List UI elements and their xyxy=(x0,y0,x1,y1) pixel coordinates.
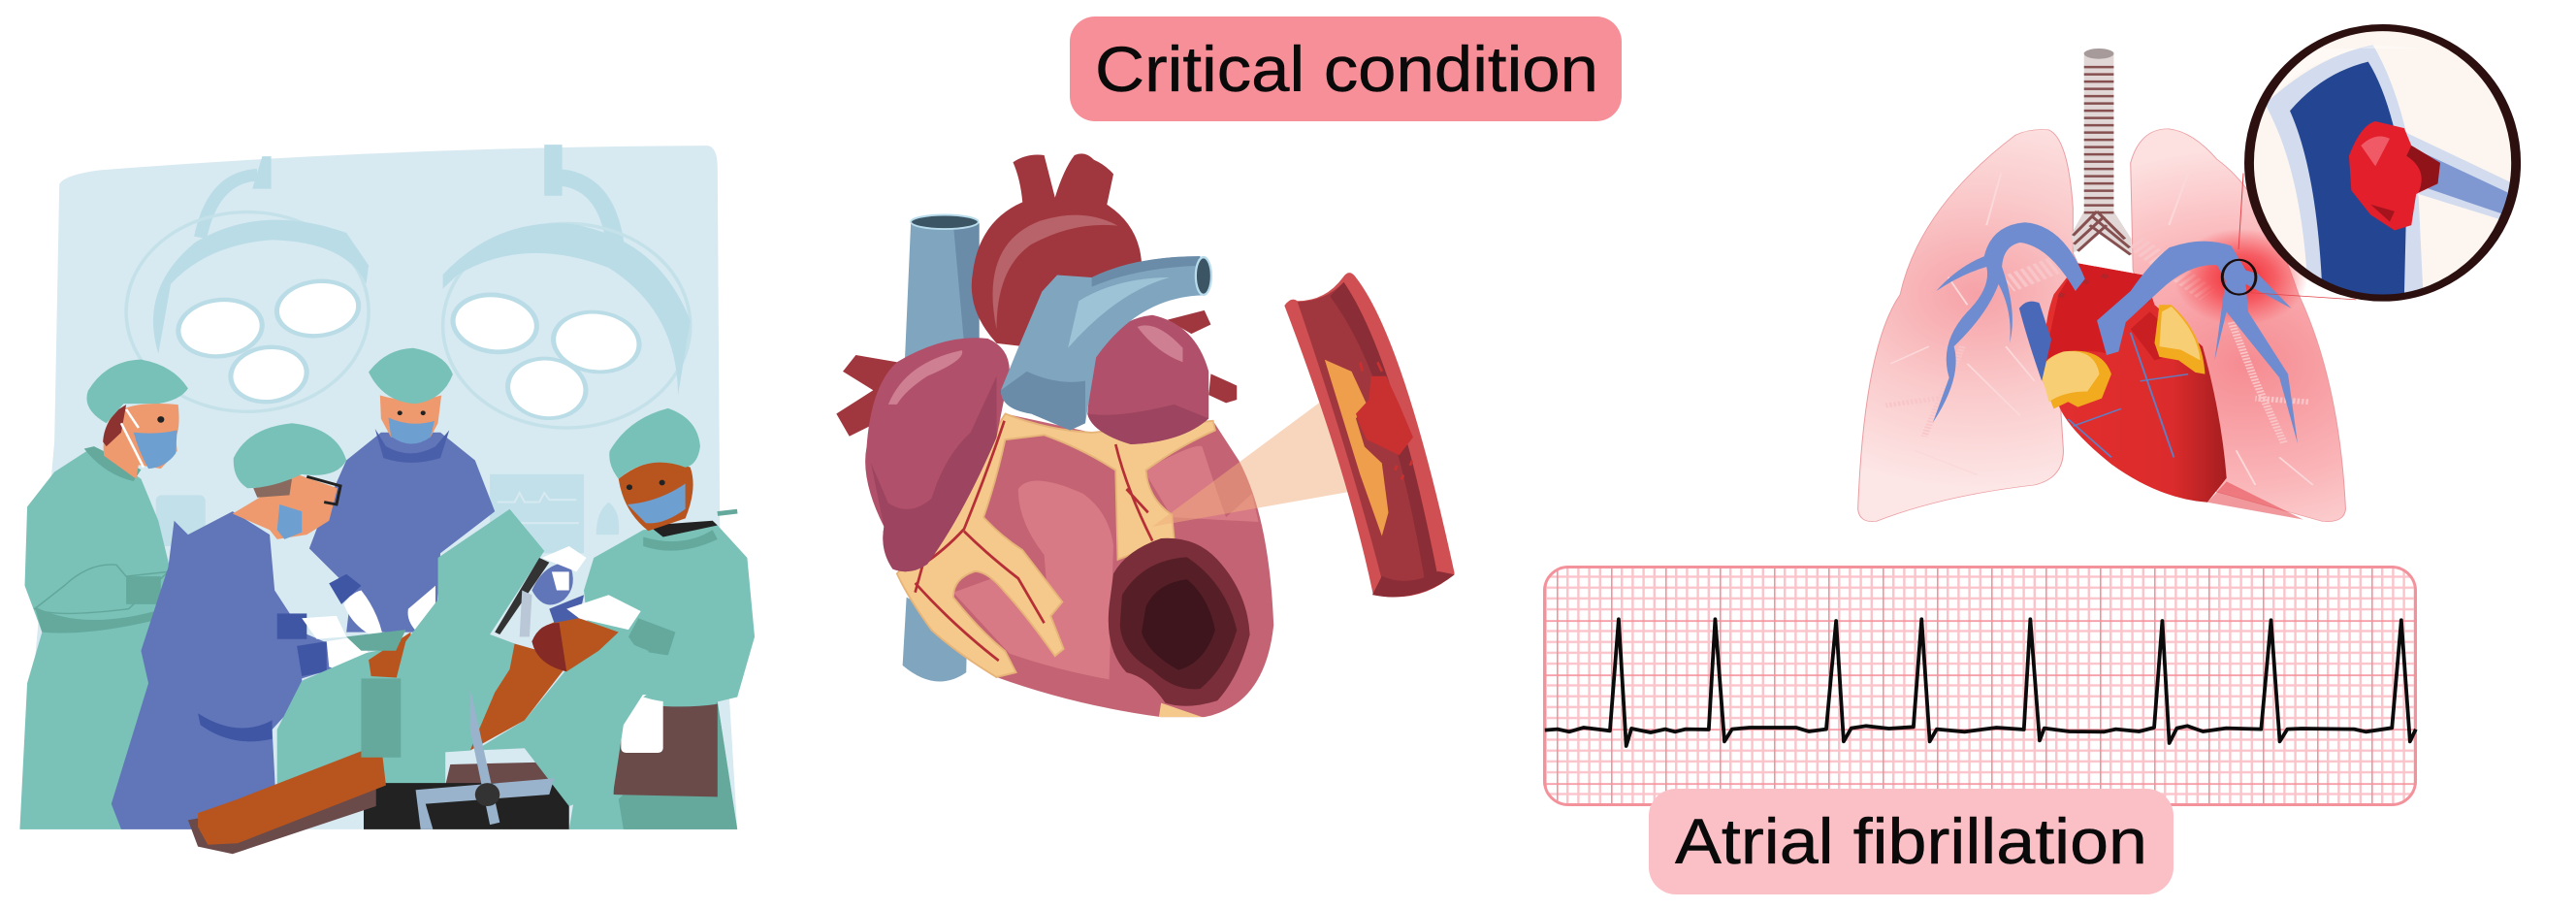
surgeon: right, teal gown xyxy=(569,408,755,829)
main ventricle xyxy=(897,414,1273,717)
illustration: heart with infarct and blocked artery xyxy=(836,153,1455,717)
surgeon: centre, blue gown xyxy=(309,348,495,636)
lung: left xyxy=(1858,130,2077,522)
embolus locator ring xyxy=(2222,260,2256,295)
zoom guide lines xyxy=(2238,174,2356,300)
label pill: Atrial fibrillation xyxy=(1649,789,2174,894)
pulmonary trunk and vessels xyxy=(836,153,1237,437)
illustration: surgical team in operating room xyxy=(19,145,755,854)
monitor in background xyxy=(156,474,619,553)
heart xyxy=(2042,263,2303,520)
label pill: Atrial fibrillation: Atrial fibrillation xyxy=(1675,805,2147,877)
illustration: lungs, heart and pulmonary embolism xyxy=(1858,28,2516,522)
pulmonary vessels xyxy=(1933,222,2298,443)
trachea and bronchi xyxy=(2072,49,2132,256)
ECG strip panel xyxy=(1543,566,2417,806)
magnified vessel with clot xyxy=(2249,28,2516,298)
table clamp xyxy=(416,688,554,829)
vena cava xyxy=(903,215,980,681)
aorta xyxy=(1001,256,1211,431)
head drape xyxy=(475,636,653,806)
ECG trace xyxy=(1545,619,2416,746)
coronary fat and arteries xyxy=(897,414,1215,717)
surgeon: front, blue gown xyxy=(112,423,369,829)
operating table xyxy=(188,763,569,854)
surgical lamp: right xyxy=(443,145,691,428)
myocardial infarct zone xyxy=(1109,538,1250,706)
lung: right xyxy=(2131,129,2345,522)
surgical lamp: left xyxy=(126,156,369,411)
blocked artery cross-section xyxy=(1284,273,1455,597)
left atrium xyxy=(1087,315,1208,444)
ECG grid paper xyxy=(1543,566,2417,806)
lower surgical drape xyxy=(277,636,445,795)
surgeon: left, teal gown xyxy=(19,360,188,829)
patient xyxy=(198,618,653,845)
right atrium xyxy=(865,338,1010,571)
title pill: Critical condition xyxy=(1070,16,1622,121)
operating room wall xyxy=(19,146,737,829)
surgical drape flap xyxy=(346,509,544,760)
anaesthesia mask and gloves xyxy=(495,546,641,636)
magnification cone xyxy=(1152,400,1352,527)
title pill: Critical condition: Critical condition xyxy=(1095,33,1598,105)
